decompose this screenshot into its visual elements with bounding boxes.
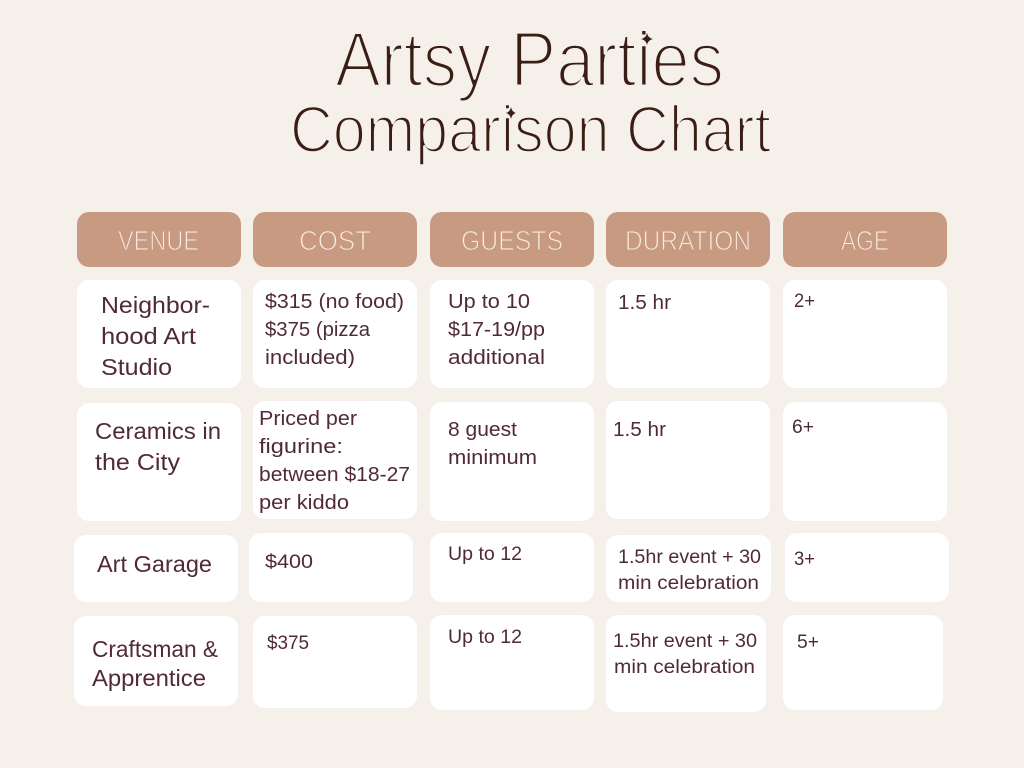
row 3 duration: 1.5hr event + 30 (618, 547, 761, 568)
row 4 age (783, 615, 943, 710)
row 2 age (783, 402, 947, 521)
row 3 duration (606, 535, 771, 602)
row 2 cost: figurine: (259, 436, 343, 458)
row 3 age: 3+ (794, 549, 815, 570)
row 4 guests: Up to 12 (448, 627, 522, 648)
row 4 venue: Craftsman & Apprentice: Apprentice (92, 665, 206, 691)
header: guests (430, 212, 594, 267)
row 4 venue: Craftsman & Apprentice (74, 616, 238, 706)
row 4 age: 5+ (797, 632, 819, 653)
row 4 duration: 1.5hr event + 30 (613, 631, 757, 652)
row 3 guests: Up to 12 (448, 544, 522, 565)
row 3 cost: $400 (265, 552, 313, 573)
row 4 duration: min celebration (614, 657, 755, 678)
row 1 guests: Up to 10 (448, 291, 530, 313)
header: venue: VENUE (118, 225, 199, 256)
row 4 duration (606, 615, 766, 712)
row 1 cost: $315 (no food) (265, 291, 404, 313)
row 1 guests (430, 280, 594, 388)
row 1 duration: 1.5 hr (618, 292, 671, 314)
header: venue (77, 212, 241, 267)
header: cost (253, 212, 417, 267)
row 3 duration: min celebration (618, 573, 759, 594)
row 2 venue: Ceramics in the City: the City (95, 449, 181, 475)
row 4 cost (253, 616, 417, 708)
row 2 cost (253, 401, 417, 519)
row 3 cost (249, 533, 413, 602)
row 2 age: 6+ (792, 417, 814, 438)
header: guests: GUESTS (461, 225, 563, 256)
row 4 venue: Craftsman & Apprentice: Craftsman & (92, 636, 218, 662)
title (290, 15, 771, 166)
row 2 guests (430, 402, 594, 521)
row 4 cost: $375 (267, 633, 309, 654)
row 3 guests (430, 533, 594, 602)
header: duration: DURATION (625, 225, 751, 256)
row 3 age (785, 533, 949, 602)
row 1 cost (253, 280, 417, 388)
row 2 guests: minimum (448, 447, 537, 469)
row 3 venue: Art Garage: Art Garage (97, 551, 212, 577)
row 2 cost: per kiddo (259, 492, 349, 514)
title: Comparison Chart (290, 92, 771, 166)
row 1 duration (606, 280, 770, 388)
row 2 guests: 8 guest (448, 419, 517, 441)
header: cost: COST (299, 225, 371, 256)
row 4 guests (430, 615, 594, 710)
row 1 cost: $375 (pizza (265, 319, 371, 341)
row 1 venue: Neighborhood Art Studio: hood Art (101, 323, 197, 349)
row 2 duration: 1.5 hr (613, 419, 666, 441)
row 1 guests: $17-19/pp (448, 319, 545, 341)
row 1 venue: Neighborhood Art Studio (77, 280, 241, 388)
row 1 venue: Neighborhood Art Studio: Studio (101, 354, 172, 380)
row 1 guests: additional (448, 347, 545, 369)
header: age (783, 212, 947, 267)
row 1 age: 2+ (794, 291, 815, 312)
title: Artsy Parties (335, 15, 724, 103)
header: duration (606, 212, 770, 267)
header: age: AGE (841, 225, 889, 256)
row 1 venue: Neighborhood Art Studio: Neighbor- (101, 292, 210, 318)
row 2 venue: Ceramics in the City (77, 403, 241, 521)
row 1 cost: included) (265, 347, 355, 369)
row 2 cost: between $18-27 (259, 464, 410, 486)
row 1 age (783, 280, 947, 388)
row 2 venue: Ceramics in the City: Ceramics in (95, 418, 221, 444)
row 2 cost: Priced per (259, 408, 357, 430)
row 3 venue: Art Garage (74, 535, 238, 602)
row 2 duration (606, 401, 770, 519)
